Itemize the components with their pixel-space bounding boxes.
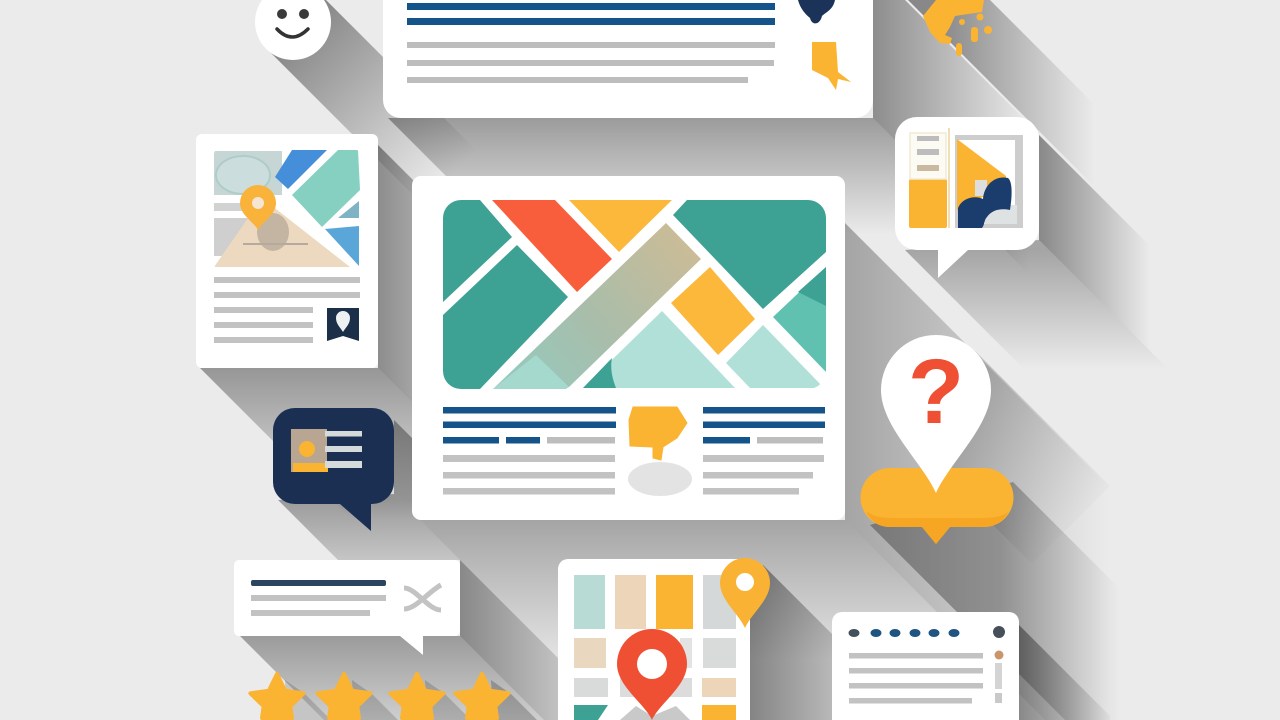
panel: navy speech bubble [273, 408, 394, 531]
question mark: ? [908, 341, 964, 443]
panel: bottom-right list card [832, 612, 1019, 720]
panel: bottom-left speech bubble [234, 560, 460, 655]
icon: yellow blob marker [629, 407, 687, 460]
icon: yellow flag [812, 42, 851, 90]
icon: yellow pin [720, 558, 770, 628]
right text block [703, 407, 825, 414]
icon: yellow pin [240, 185, 276, 230]
panel: top text card [383, 0, 873, 118]
icon: red pin [617, 629, 687, 720]
left text block [443, 407, 616, 414]
long diagonal shadows [200, 0, 1169, 720]
icon: yellow splat [923, 0, 992, 56]
rating stars [250, 674, 509, 718]
panel: left map card [196, 134, 378, 368]
icon: navy badge [327, 308, 359, 341]
mini map [214, 150, 360, 267]
icon: crossed route [404, 585, 441, 610]
icon: grey mound [628, 462, 692, 496]
icon: navy blob [798, 0, 835, 23]
mini map shadow blob [257, 213, 289, 251]
callout: question pin on capsule [860, 335, 1014, 544]
icon: smiley face [255, 0, 331, 60]
panel: calendar card [558, 558, 770, 720]
icon: white pin [881, 335, 991, 493]
panel: main map card [412, 176, 845, 520]
icon: yellow capsule [860, 468, 1014, 544]
map tiles [443, 200, 826, 389]
panel: right speech bubble [895, 117, 1039, 278]
